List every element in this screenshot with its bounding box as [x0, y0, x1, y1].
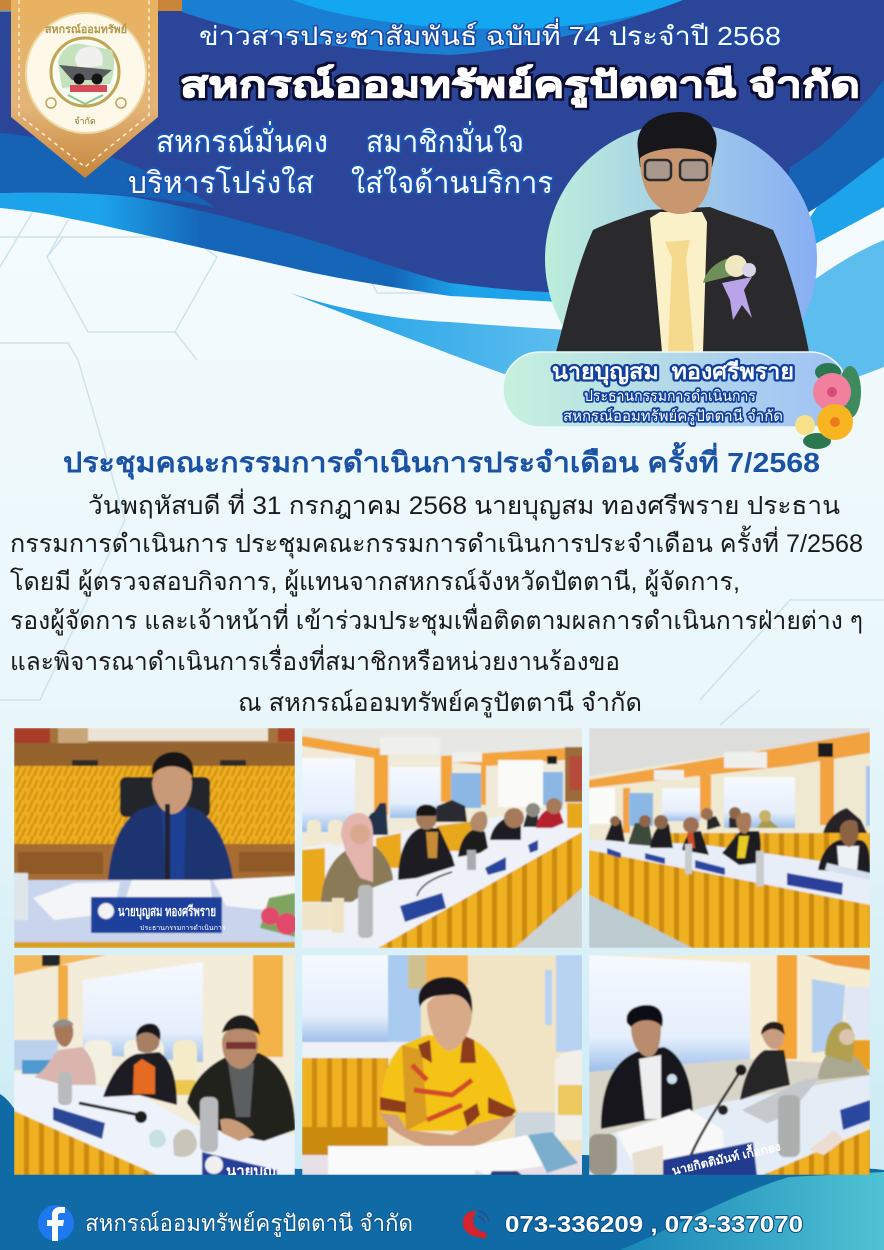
photo 1: chairman at table	[14, 728, 295, 948]
name plate: สหกรณ์ออมทรัพย์ครูปัตตานี จำกัด	[563, 408, 783, 425]
ribbon badge logo: สหกรณ์ออมทรัพย์	[45, 23, 127, 36]
icon: facebook	[38, 1205, 74, 1241]
portrait: chairman	[545, 112, 817, 395]
photo 6: young man and two staff: นายกิตติมันท์ เกื้อกอง	[670, 1136, 782, 1178]
slogan: บริหารโปร่งใส	[128, 165, 314, 200]
icon: tropical flowers	[795, 363, 861, 449]
body text: ณ สหกรณ์ออมทรัพย์ครูปัตตานี จำกัด	[238, 689, 642, 718]
photo 2: committee along table	[302, 728, 582, 948]
photo 4: three members seated	[14, 955, 295, 1181]
newsletter issue line: ข่าวสารประชาสัมพันธ์ ฉบับที่ 74 ประจำปี 2568	[199, 18, 781, 51]
phone numbers: 073-336209 , 073-337070	[505, 1211, 803, 1237]
body text: กรรมการดำเนินการ ประชุมคณะกรรมการดำเนินการประจำเดือน ครั้งที่ 7/2568	[10, 525, 863, 559]
body text: และพิจารณาดำเนินการเรื่องที่สมาชิกหรือหน่วยงานร้องขอ	[10, 644, 620, 676]
heading: meeting title: ประชุมคณะกรรมการดำเนินการประจำเดือน ครั้งที่ 7/2568	[63, 441, 820, 480]
photo 6: young man and two staff	[589, 955, 870, 1178]
slogan: ใส่ใจด้านบริการ	[351, 166, 553, 200]
photo 1: chairman at table: ประธานกรรมการดำเนินการ	[140, 924, 226, 932]
header wave background	[0, 0, 884, 380]
photo 5: woman in yellow dress	[302, 955, 582, 1175]
body text: วันพฤหัสบดี ที่ 31 กรกฎาคม 2568 นายบุญสม ทองศรีพราย ประธาน	[88, 488, 840, 521]
ribbon badge logo: จำกัด	[74, 116, 96, 126]
slogan	[128, 121, 553, 200]
name plate: นายบุญสม ทองศรีพราย	[552, 359, 794, 386]
organisation title: สหกรณ์ออมทรัพย์ครูปัตตานี จำกัด	[180, 64, 860, 108]
photo 3: committee right side of table	[589, 728, 870, 948]
footer band	[0, 1094, 884, 1250]
ribbon badge logo	[0, 0, 182, 178]
body text: รองผู้จัดการ และเจ้าหน้าที่ เข้าร่วมประชุมเพื่อติดตามผลการดำเนินการฝ่ายต่าง ๆ	[10, 603, 863, 636]
slogan: สมาชิกมั่นใจ	[366, 121, 524, 159]
icon: telephone	[463, 1211, 489, 1238]
photo 4: three members seated: นายบุญ	[226, 1163, 276, 1181]
body text	[10, 488, 863, 718]
body text: โดยมี ผู้ตรวจสอบกิจการ, ผู้แทนจากสหกรณ์จังหวัดปัตตานี, ผู้จัดการ,	[10, 567, 740, 597]
slogan: สหกรณ์มั่นคง	[156, 121, 328, 159]
name plate	[503, 352, 847, 427]
name plate: ประธานกรรมการดำเนินการ	[584, 388, 756, 405]
facebook page name: สหกรณ์ออมทรัพย์ครูปัตตานี จำกัด	[85, 1210, 413, 1237]
photo 1: chairman at table: นายบุญสม ทองศรีพราย	[118, 903, 216, 920]
